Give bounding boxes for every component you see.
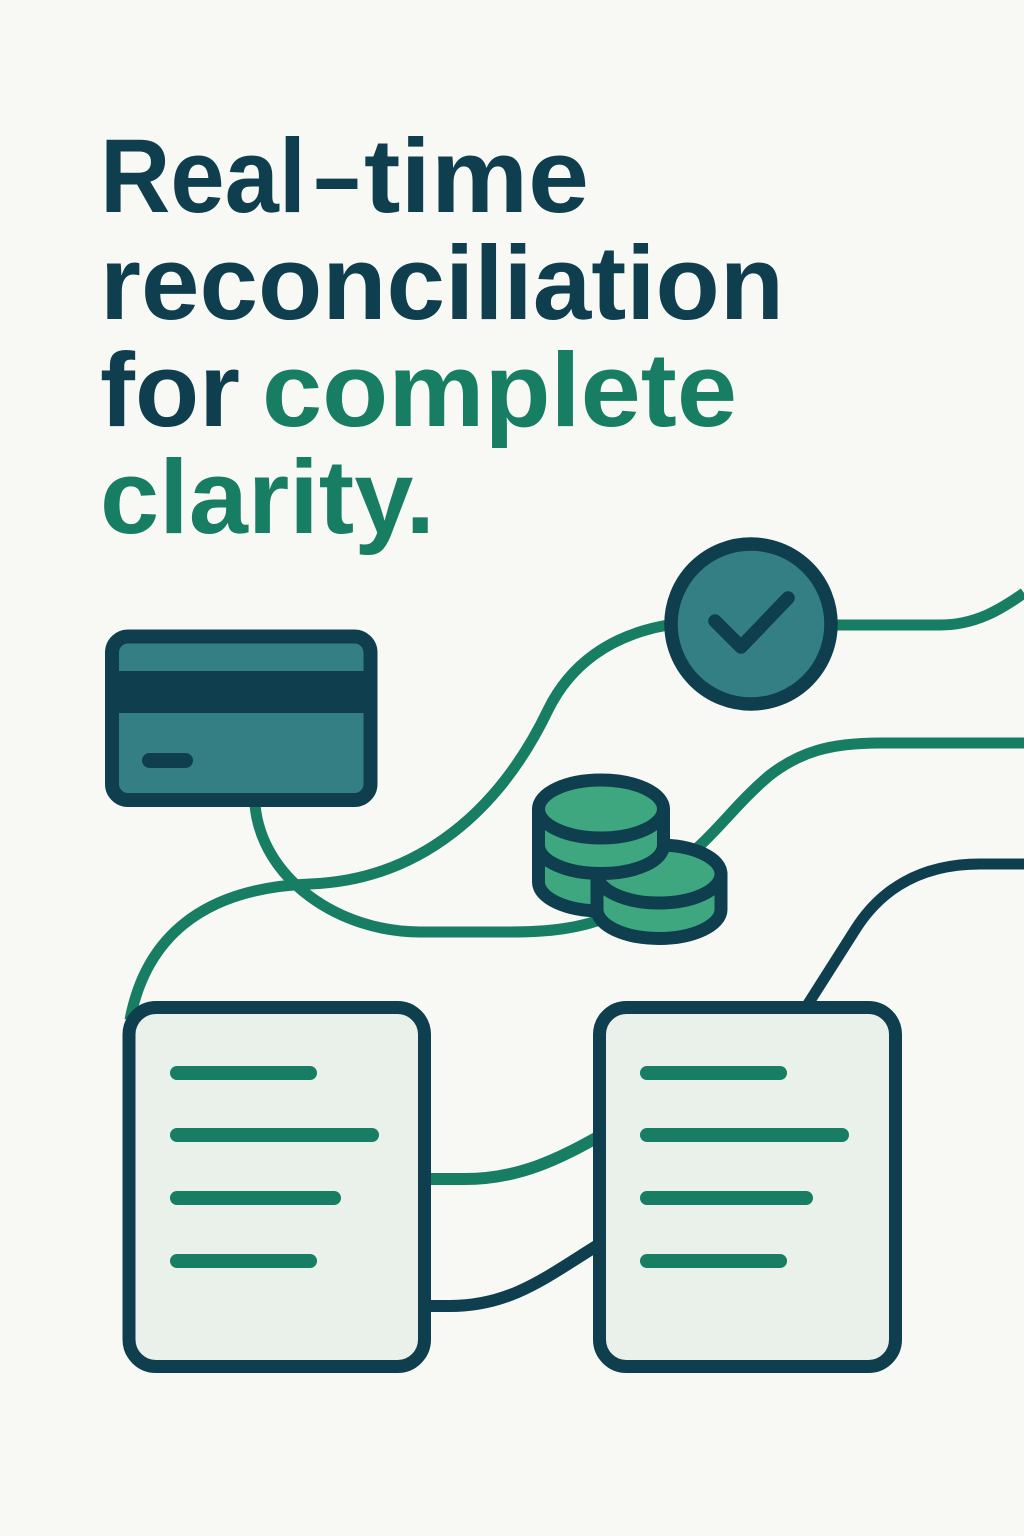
connector: check to left document — [130, 625, 668, 1020]
connector: coins to right edge — [695, 743, 1024, 850]
connector: document to right edge — [808, 864, 1024, 1004]
title: complete — [262, 332, 737, 449]
panel: right document — [600, 1008, 896, 1366]
icon: coin stack — [538, 780, 721, 938]
title: time — [364, 118, 589, 235]
connector: card to coins — [255, 805, 605, 932]
connector: check to right edge — [835, 593, 1024, 625]
title: – — [314, 118, 360, 235]
title — [100, 118, 784, 556]
title: Real — [100, 118, 306, 235]
title: clarity. — [100, 439, 435, 556]
icon: check circle — [671, 544, 831, 704]
panel: left document — [129, 1008, 424, 1366]
title: for — [100, 332, 240, 449]
connector: between documents green — [428, 1137, 598, 1179]
connector: between documents navy — [428, 1245, 598, 1306]
title: reconciliation — [100, 225, 784, 342]
icon: credit card — [112, 636, 370, 800]
